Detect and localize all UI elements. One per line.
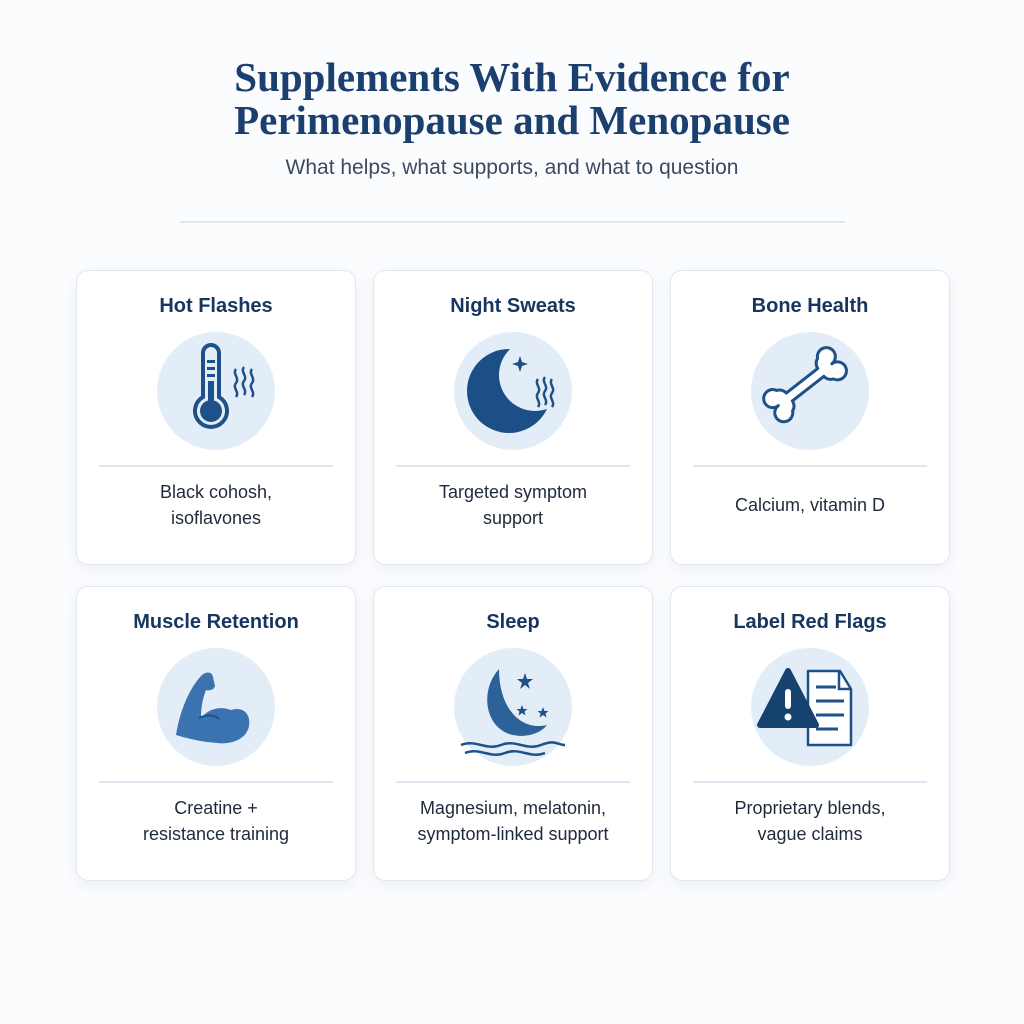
heading: night sweats: Night Sweats (450, 295, 576, 317)
text: hot flashes (160, 482, 272, 528)
heading: label red flags: Label Red Flags (733, 611, 887, 633)
text: muscle retention (143, 798, 289, 844)
text: bone health: Calcium, vitamin D (735, 495, 885, 515)
text: hot flashes: isoflavones (171, 508, 261, 528)
panel: muscle retention (76, 586, 356, 881)
panel: bone health (670, 270, 950, 565)
icon: thermometer (157, 332, 275, 450)
icon: flexed arm (157, 648, 275, 766)
title (234, 54, 790, 143)
title: Supplements With Evidence for (234, 54, 790, 100)
icon: bone (751, 332, 869, 450)
heading: muscle retention: Muscle Retention (133, 611, 299, 633)
heading: sleep: Sleep (486, 611, 540, 633)
heading: bone health: Bone Health (752, 295, 868, 317)
text: night sweats (439, 482, 587, 528)
text: sleep: Magnesium, melatonin, (420, 798, 606, 818)
icon: moon (454, 332, 572, 450)
title: Perimenopause and Menopause (234, 97, 790, 143)
icon: warning and document (751, 648, 869, 766)
text: night sweats: support (483, 508, 543, 528)
heading: hot flashes: Hot Flashes (159, 295, 273, 317)
text: label red flags: vague claims (757, 824, 863, 844)
panel: sleep (373, 586, 653, 881)
subtitle: What helps, what supports, and what to question (286, 156, 738, 179)
text: muscle retention: resistance training (143, 824, 289, 844)
text: night sweats: Targeted symptom (439, 482, 587, 502)
icon: moon with stars (454, 648, 572, 766)
text: sleep: symptom-linked support (417, 824, 609, 844)
text: hot flashes: Black cohosh, (160, 482, 272, 502)
panel: hot flashes (76, 270, 356, 565)
text: sleep (417, 798, 609, 844)
panel: night sweats (373, 270, 653, 565)
text: label red flags (734, 798, 886, 844)
text: label red flags: Proprietary blends, (734, 798, 886, 818)
panel: label red flags (670, 586, 950, 881)
text: muscle retention: Creatine + (174, 798, 258, 818)
